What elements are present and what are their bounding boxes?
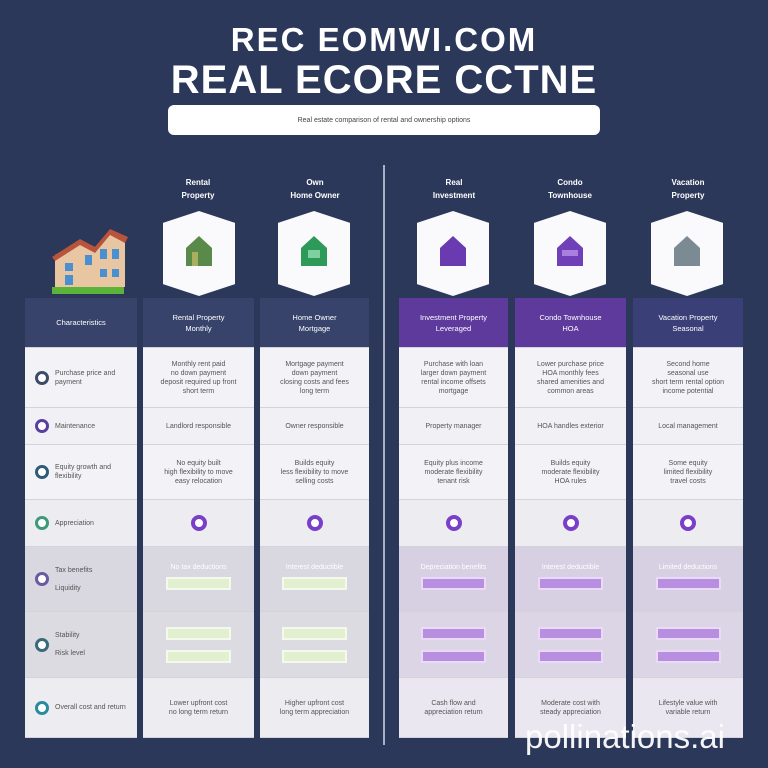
column 3: Cash flow and [431, 700, 476, 706]
label column: Maintenance [55, 422, 95, 430]
icon hex 5 [651, 211, 723, 296]
column 1: Monthly rent paid [172, 360, 225, 368]
column headings: Property [182, 191, 214, 200]
column 3: Purchase with loan [424, 360, 483, 368]
column 2: Home Owner [292, 312, 337, 322]
label column: Stability [55, 632, 80, 639]
column 5: Vacation Property [658, 312, 718, 322]
column 5: Local management [658, 422, 718, 430]
column 1: no long term return [169, 708, 228, 716]
column 2: down payment [292, 370, 337, 376]
column 1: No equity built [176, 460, 221, 466]
icon: house illustration [52, 229, 128, 294]
column 4: Builds equity [551, 460, 590, 466]
heading 4: Townhouse [548, 191, 592, 200]
column 2: Interest deductible [286, 564, 343, 571]
column 1: No tax deductions [170, 564, 227, 571]
column 3: larger down payment [421, 370, 486, 376]
column 2: less flexibility to move [281, 468, 348, 476]
subtitle pill: Real estate comparison of rental and ownership options [298, 116, 470, 124]
column 1: short term [183, 388, 214, 394]
column 3: tenant risk [437, 478, 470, 484]
subtitle pill [168, 105, 600, 135]
column 4: HOA rules [555, 478, 586, 484]
column 1: high flexibility to move [164, 468, 233, 476]
column 5: income potential [662, 388, 713, 394]
title: REAL ECORE CCTNE [171, 58, 597, 102]
heading 2: Own [306, 178, 324, 187]
column 1: Monthly [185, 324, 212, 332]
column 2: closing costs and fees [280, 378, 349, 386]
column 5: Seasonal [672, 324, 704, 332]
column 5: variable return [666, 708, 710, 716]
label column: Overall cost and return [55, 704, 126, 711]
column 4: common areas [547, 388, 594, 394]
heading 2 [290, 178, 340, 200]
heading 3 [433, 178, 476, 200]
column 2: Builds equity [295, 460, 334, 466]
column 2: Higher upfront cost [285, 700, 344, 706]
heading 3: Real [446, 178, 462, 187]
column 5: short term rental option [652, 378, 724, 386]
column 1: easy relocation [175, 478, 222, 484]
column 4: moderate flexibility [542, 468, 599, 476]
label column: Liquidity [55, 584, 81, 592]
column 4 [515, 298, 626, 738]
column 5: limited flexibility [664, 468, 712, 476]
heading 5: Vacation [672, 178, 704, 187]
column 5: Lifestyle value with [659, 700, 717, 706]
icon hex 4 [534, 211, 606, 296]
column 5: Limited deductions [659, 564, 717, 571]
icon hex 1 [163, 211, 235, 296]
column headings [182, 178, 214, 200]
column 4: shared amenities and [537, 378, 604, 386]
heading 2: Home Owner [290, 191, 340, 200]
column 1: Rental Property [172, 312, 225, 322]
column 1: Lower upfront cost [170, 700, 227, 706]
column 3: Equity plus income [424, 460, 483, 466]
column 2: Mortgage payment [285, 360, 344, 368]
column 4: HOA handles exterior [537, 422, 604, 430]
column 5: seasonal use [667, 370, 709, 376]
column 1 [143, 298, 254, 738]
column 5: Some equity [669, 460, 707, 466]
label column: Tax benefits [55, 566, 92, 574]
column 1: Landlord responsible [166, 422, 231, 430]
column 2: long term appreciation [280, 708, 349, 716]
title: REC EOMWI.COM [231, 21, 537, 58]
label column: Risk level [55, 650, 85, 657]
column 4: HOA [562, 324, 579, 332]
heading 5 [672, 178, 704, 200]
column 4: Interest deductible [542, 564, 599, 571]
column 4: HOA monthly fees [542, 370, 599, 376]
column 2 [260, 298, 369, 738]
column 3: moderate flexibility [424, 468, 482, 476]
column 3: Investment Property [420, 312, 487, 322]
title [171, 21, 597, 102]
column 3: Property manager [425, 422, 482, 430]
heading 4 [548, 178, 592, 200]
column 1: deposit required up front [161, 378, 236, 386]
column 3: Leveraged [436, 324, 471, 332]
column 3: mortgage [439, 388, 468, 394]
heading 3: Investment [433, 191, 475, 200]
column 2: Mortgage [299, 324, 330, 332]
column 3: Depreciation benefits [421, 564, 486, 571]
divider [383, 165, 385, 745]
column 3 [399, 298, 508, 738]
icon hex 3 [417, 211, 489, 296]
column 1: no down payment [171, 370, 226, 376]
column 4: Condo Townhouse [540, 312, 602, 322]
column 5 [633, 298, 743, 738]
column 2: selling costs [295, 478, 334, 484]
column 5: travel costs [670, 478, 706, 484]
label column [25, 298, 137, 738]
label column: Appreciation [55, 520, 94, 526]
column 3: appreciation return [424, 708, 483, 716]
label column: Characteristics [56, 318, 106, 327]
label column: Equity growth and flexibility [55, 464, 111, 480]
label column: Purchase price and payment [55, 370, 115, 386]
column 2: long term [300, 388, 329, 394]
icon hex 2 [278, 211, 350, 296]
heading 5: Property [672, 191, 704, 200]
column 3: rental income offsets [421, 378, 486, 386]
column headings: Rental [186, 178, 210, 187]
column 5: Second home [666, 360, 710, 368]
column 2: Owner responsible [285, 422, 344, 430]
column 4: Lower purchase price [537, 360, 604, 368]
column 4: Moderate cost with [541, 700, 600, 706]
heading 4: Condo [557, 178, 583, 187]
column 4: steady appreciation [540, 708, 601, 716]
watermark: pollinations.ai [525, 718, 725, 755]
